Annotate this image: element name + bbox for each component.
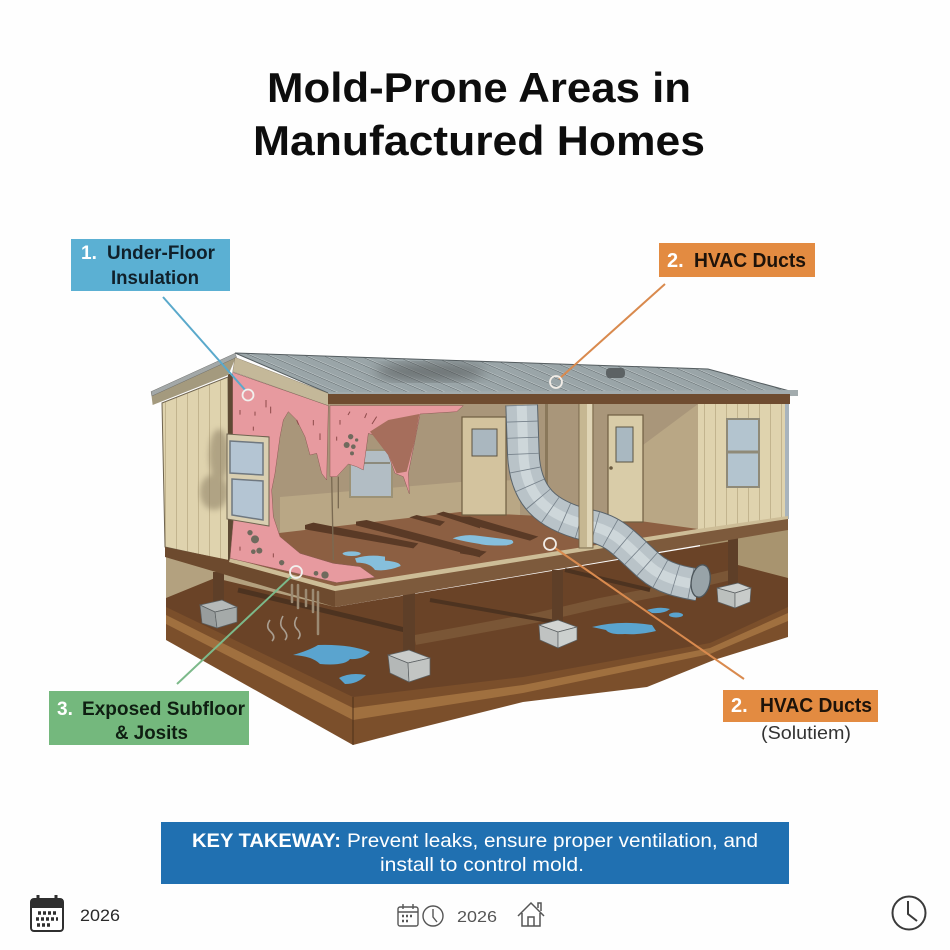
pink insulation on left wall xyxy=(230,372,375,583)
callout line: subfloor xyxy=(177,566,302,684)
footer centre: calendar icon xyxy=(398,904,418,926)
right wall edge xyxy=(785,403,789,519)
right exterior window xyxy=(727,419,759,487)
key takeaway banner: install to control mold. xyxy=(380,855,584,876)
key takeaway banner xyxy=(161,822,789,884)
label: HVAC ducts bottom xyxy=(723,690,878,722)
title: Manufactured Homes xyxy=(253,117,705,164)
centre post xyxy=(579,403,593,548)
callout line: HVAC floor xyxy=(544,538,744,679)
concrete piers xyxy=(200,583,751,682)
callout line: HVAC roof xyxy=(550,284,665,388)
rear window xyxy=(350,450,392,497)
footer right: clock icon xyxy=(892,896,926,930)
floor puddles xyxy=(343,535,513,570)
key takeaway banner: Prevent leaks, ensure proper ventilation, and xyxy=(347,831,758,852)
footer left: calendar icon xyxy=(31,895,63,931)
label: exposed subfloor and joists: & Josits xyxy=(115,723,188,744)
label: HVAC ducts bottom: 2. xyxy=(731,695,748,717)
label: exposed subfloor and joists xyxy=(49,691,249,745)
label: under-floor insulation xyxy=(71,239,230,291)
right exterior wall xyxy=(698,403,785,531)
footer centre: year: 2026 xyxy=(457,909,497,926)
posts xyxy=(213,530,738,656)
crawlspace back wall right xyxy=(700,520,788,585)
steam lines xyxy=(268,616,300,641)
puddles on ground xyxy=(293,608,683,684)
soil block side xyxy=(166,600,788,745)
interior wall stud xyxy=(545,404,548,514)
left window xyxy=(227,434,269,526)
footer centre: clock icon xyxy=(423,906,443,926)
ceiling beam xyxy=(328,394,790,404)
lit wall areas xyxy=(280,404,698,535)
soil surface xyxy=(166,540,788,697)
door 1 xyxy=(462,417,506,515)
label: exposed subfloor and joists: Exposed Subfloor xyxy=(82,699,246,720)
label: HVAC ducts bottom: HVAC Ducts xyxy=(760,695,872,717)
key takeaway banner: KEY TAKEWAY: xyxy=(192,831,341,852)
under-floor joists xyxy=(238,570,735,640)
label: HVAC ducts top xyxy=(659,243,815,277)
left gable fascia and soffit xyxy=(151,353,328,406)
left exterior wall xyxy=(162,377,229,561)
label: exposed subfloor and joists: 3. xyxy=(57,699,73,720)
interior floor xyxy=(229,512,698,590)
title: Mold-Prone Areas in xyxy=(267,64,691,111)
pink insulation hanging from ceiling xyxy=(330,406,463,560)
crawlspace back wall left xyxy=(166,555,335,620)
floor boards right xyxy=(460,517,538,557)
label: HVAC ducts top: HVAC Ducts xyxy=(694,250,806,272)
callout line: under-floor insulation xyxy=(163,297,254,400)
floor boards xyxy=(305,512,480,557)
footer left: year: 2026 xyxy=(80,906,120,925)
floor edge and rim beam xyxy=(165,516,788,607)
rear interior wall xyxy=(229,402,699,534)
label: under-floor insulation: 1. xyxy=(81,243,97,264)
corner post xyxy=(228,374,233,562)
label: HVAC ducts top: 2. xyxy=(667,250,684,272)
metal roof xyxy=(235,353,798,397)
caption: solution note: (Solutiem) xyxy=(761,723,851,743)
mold stain on siding xyxy=(200,429,229,510)
title xyxy=(253,64,705,164)
door 2 xyxy=(608,415,643,522)
label: under-floor insulation: Insulation xyxy=(111,268,199,289)
footer centre: house icon xyxy=(518,903,544,926)
flexible HVAC duct xyxy=(522,405,713,599)
label: under-floor insulation: Under-Floor xyxy=(107,243,216,264)
illustration: manufactured home cutaway xyxy=(151,353,798,745)
drips under floor xyxy=(292,585,318,634)
